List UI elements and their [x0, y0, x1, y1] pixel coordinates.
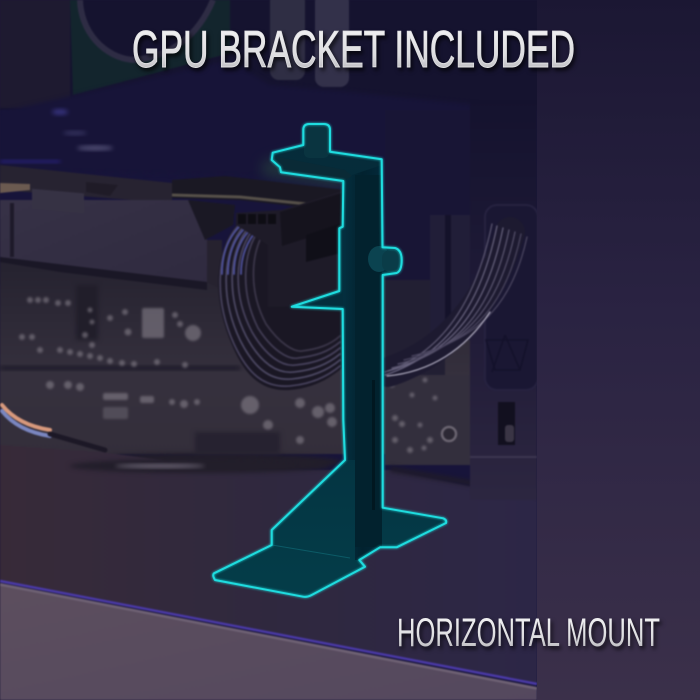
power cable left	[218, 225, 342, 390]
power connector	[236, 190, 345, 307]
colored ribbon cable	[2, 405, 105, 450]
bracket column	[343, 165, 382, 560]
top knob	[304, 126, 329, 158]
bracket arm shading	[272, 156, 352, 181]
case side panel	[470, 100, 538, 500]
power cable right	[385, 224, 527, 376]
bracket body	[213, 124, 446, 597]
GPU bracket	[213, 124, 446, 597]
glowing outline	[213, 124, 446, 597]
graphics card	[0, 165, 345, 290]
motherboard	[0, 110, 480, 471]
circuit board behind graphics card	[0, 60, 480, 190]
side knob	[368, 246, 401, 272]
board components	[19, 297, 438, 453]
base fold line	[272, 545, 350, 558]
floor of the case	[0, 445, 537, 700]
cooler and tubing at top	[0, 0, 349, 108]
dark connector	[60, 453, 340, 471]
right case panel	[537, 0, 700, 700]
